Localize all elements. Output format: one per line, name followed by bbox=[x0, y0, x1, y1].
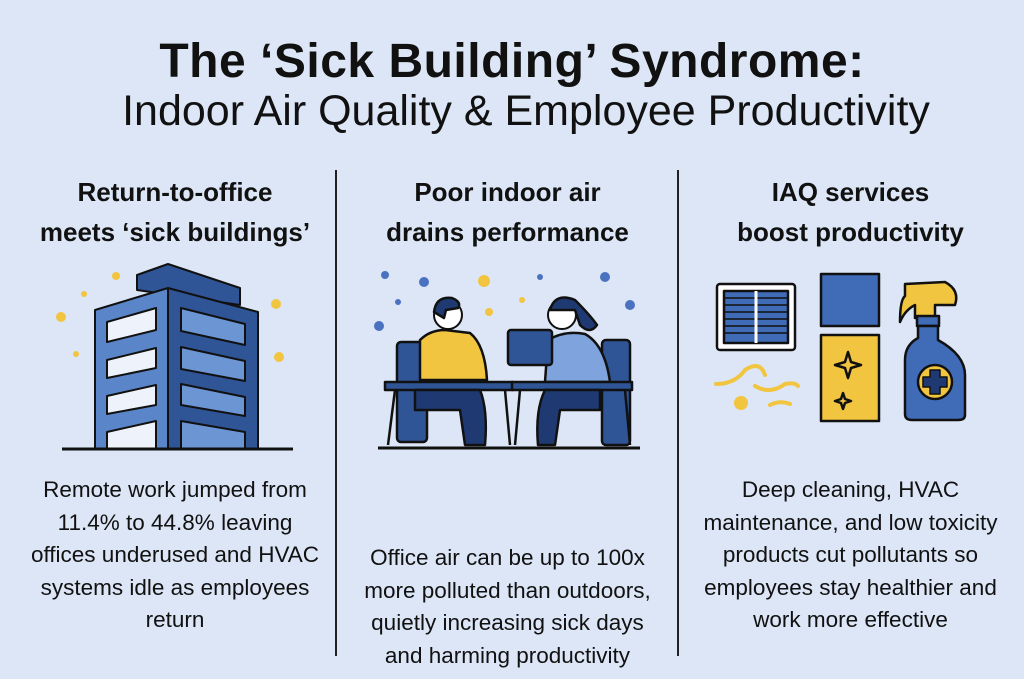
heading: return to office: meets ‘sick buildings’ bbox=[40, 217, 310, 247]
text: office air: Office air can be up to 100x bbox=[370, 545, 645, 570]
panel: IAQ services bbox=[704, 177, 998, 632]
panel: return to office bbox=[31, 177, 319, 632]
icon: people at desks bbox=[374, 271, 640, 450]
panel: poor air bbox=[364, 177, 651, 668]
icon: cleaning tools bbox=[714, 272, 966, 422]
text: deep cleaning: products cut pollutants so bbox=[723, 542, 978, 567]
heading: poor air: drains performance bbox=[386, 217, 629, 247]
text: remote work bbox=[31, 477, 319, 632]
text: remote work: return bbox=[146, 607, 204, 632]
text: remote work: 11.4% to 44.8% leaving bbox=[58, 510, 292, 534]
heading: return to office: Return-to-office bbox=[78, 177, 272, 207]
heading: return to office bbox=[40, 177, 310, 247]
text: deep cleaning: employees stay healthier and bbox=[704, 574, 997, 600]
heading: poor air: Poor indoor air bbox=[414, 177, 601, 207]
text: office air: quietly increasing sick days bbox=[371, 610, 644, 635]
subtitle: Indoor Air Quality & Employee Productivity bbox=[122, 87, 930, 135]
text: deep cleaning bbox=[704, 477, 998, 632]
title: The ‘Sick Building’ Syndrome: bbox=[159, 35, 865, 88]
text: office air: and harming productivity bbox=[385, 642, 630, 668]
text: deep cleaning: work more effective bbox=[753, 607, 948, 632]
text: office air bbox=[364, 545, 651, 668]
heading: IAQ services: IAQ services bbox=[772, 177, 929, 207]
text: deep cleaning: Deep cleaning, HVAC bbox=[742, 477, 959, 502]
heading: IAQ services bbox=[737, 177, 964, 247]
icon: building bbox=[56, 263, 293, 450]
text: office air: more polluted than outdoors, bbox=[364, 578, 651, 602]
text: remote work: offices underused and HVAC bbox=[31, 542, 319, 567]
heading: IAQ services: boost productivity bbox=[737, 217, 964, 247]
text: remote work: Remote work jumped from bbox=[43, 477, 307, 502]
heading: poor air bbox=[386, 177, 629, 247]
text: deep cleaning: maintenance, and low toxicity bbox=[704, 510, 997, 534]
text: remote work: systems idle as employees bbox=[41, 574, 309, 600]
